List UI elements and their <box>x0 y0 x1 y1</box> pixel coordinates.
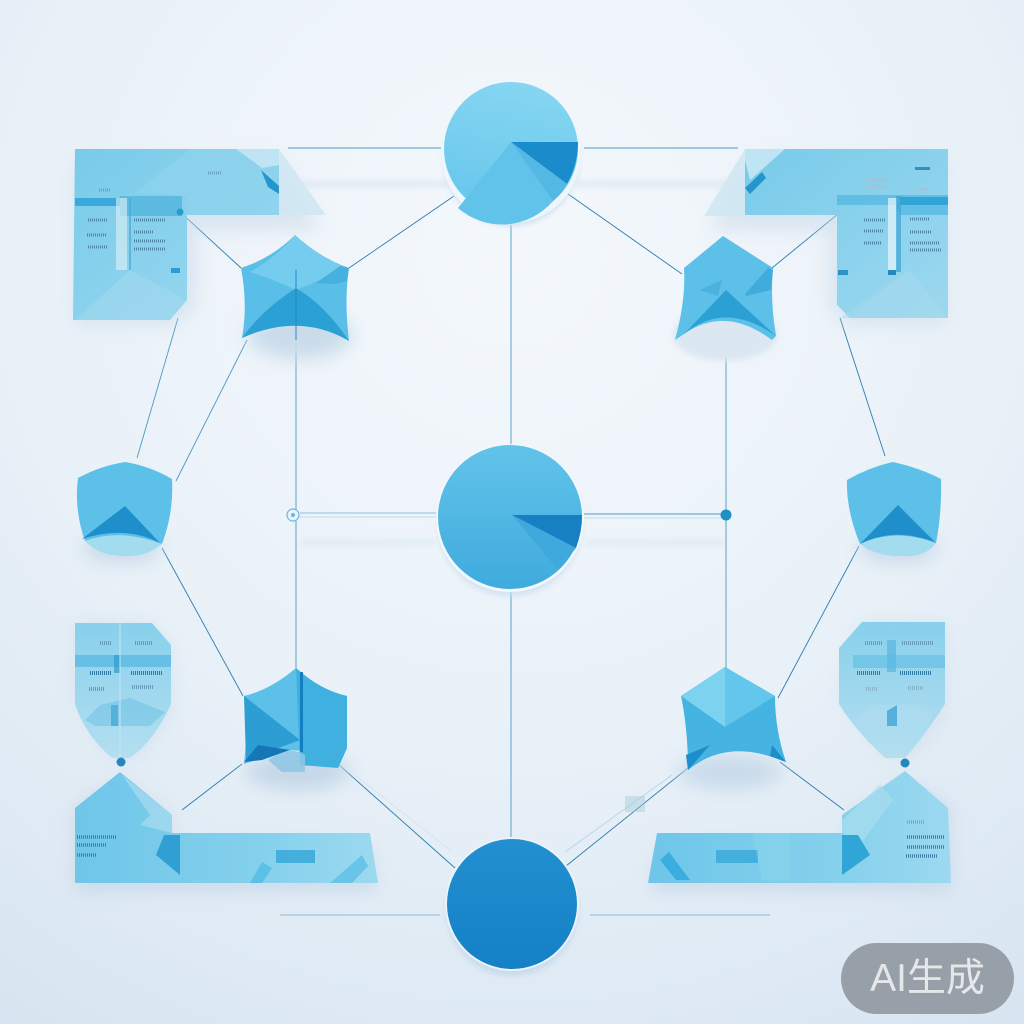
node: centre circle <box>436 444 584 596</box>
panel: top right <box>704 149 948 325</box>
junction dot right <box>720 510 732 520</box>
node: bottom centre circle <box>445 837 579 976</box>
panel: bottom right upper shield <box>839 622 945 758</box>
node: pentagon right <box>847 462 941 564</box>
node: top centre circle <box>441 82 581 226</box>
node: hexagon top left <box>241 235 352 359</box>
badge: AI generated: AI生成 <box>870 957 985 1000</box>
panel: top left <box>73 149 326 325</box>
soft guide bands <box>300 181 735 545</box>
node: pentagon left <box>77 462 172 564</box>
junction dot left <box>287 509 299 521</box>
badge: AI generated <box>841 943 1014 1014</box>
micro text <box>87 173 221 249</box>
node: hexagon bottom right <box>678 667 786 790</box>
panel: bottom left lower L-shape <box>75 772 378 891</box>
panel: bottom left upper shield <box>75 623 171 758</box>
connector dot bottom left <box>116 758 126 766</box>
band <box>75 198 120 206</box>
node: hexagon top right <box>673 236 777 361</box>
hatch smudge <box>625 796 645 812</box>
node: hexagon bottom left <box>244 668 350 790</box>
connector dot bottom right <box>900 758 910 768</box>
connector lines <box>137 148 885 915</box>
panel: bottom right lower L-shape <box>648 771 951 891</box>
